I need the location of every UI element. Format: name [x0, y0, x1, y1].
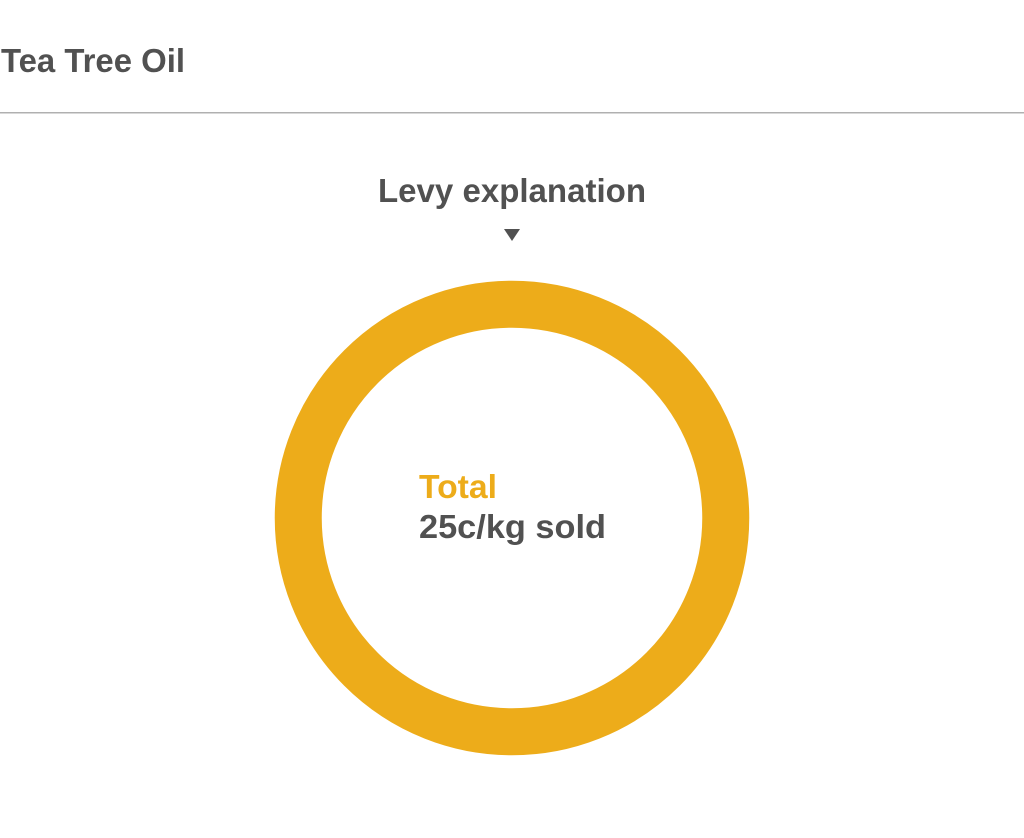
heading: levy explanation: Levy explanation: [378, 172, 646, 209]
label: levy amount: 25c/kg sold: [419, 508, 606, 545]
donut chart: [298, 304, 726, 732]
arrow: pointing down: [504, 229, 520, 241]
label: total: Total: [419, 468, 497, 505]
title: Tea Tree Oil: [1, 42, 185, 79]
